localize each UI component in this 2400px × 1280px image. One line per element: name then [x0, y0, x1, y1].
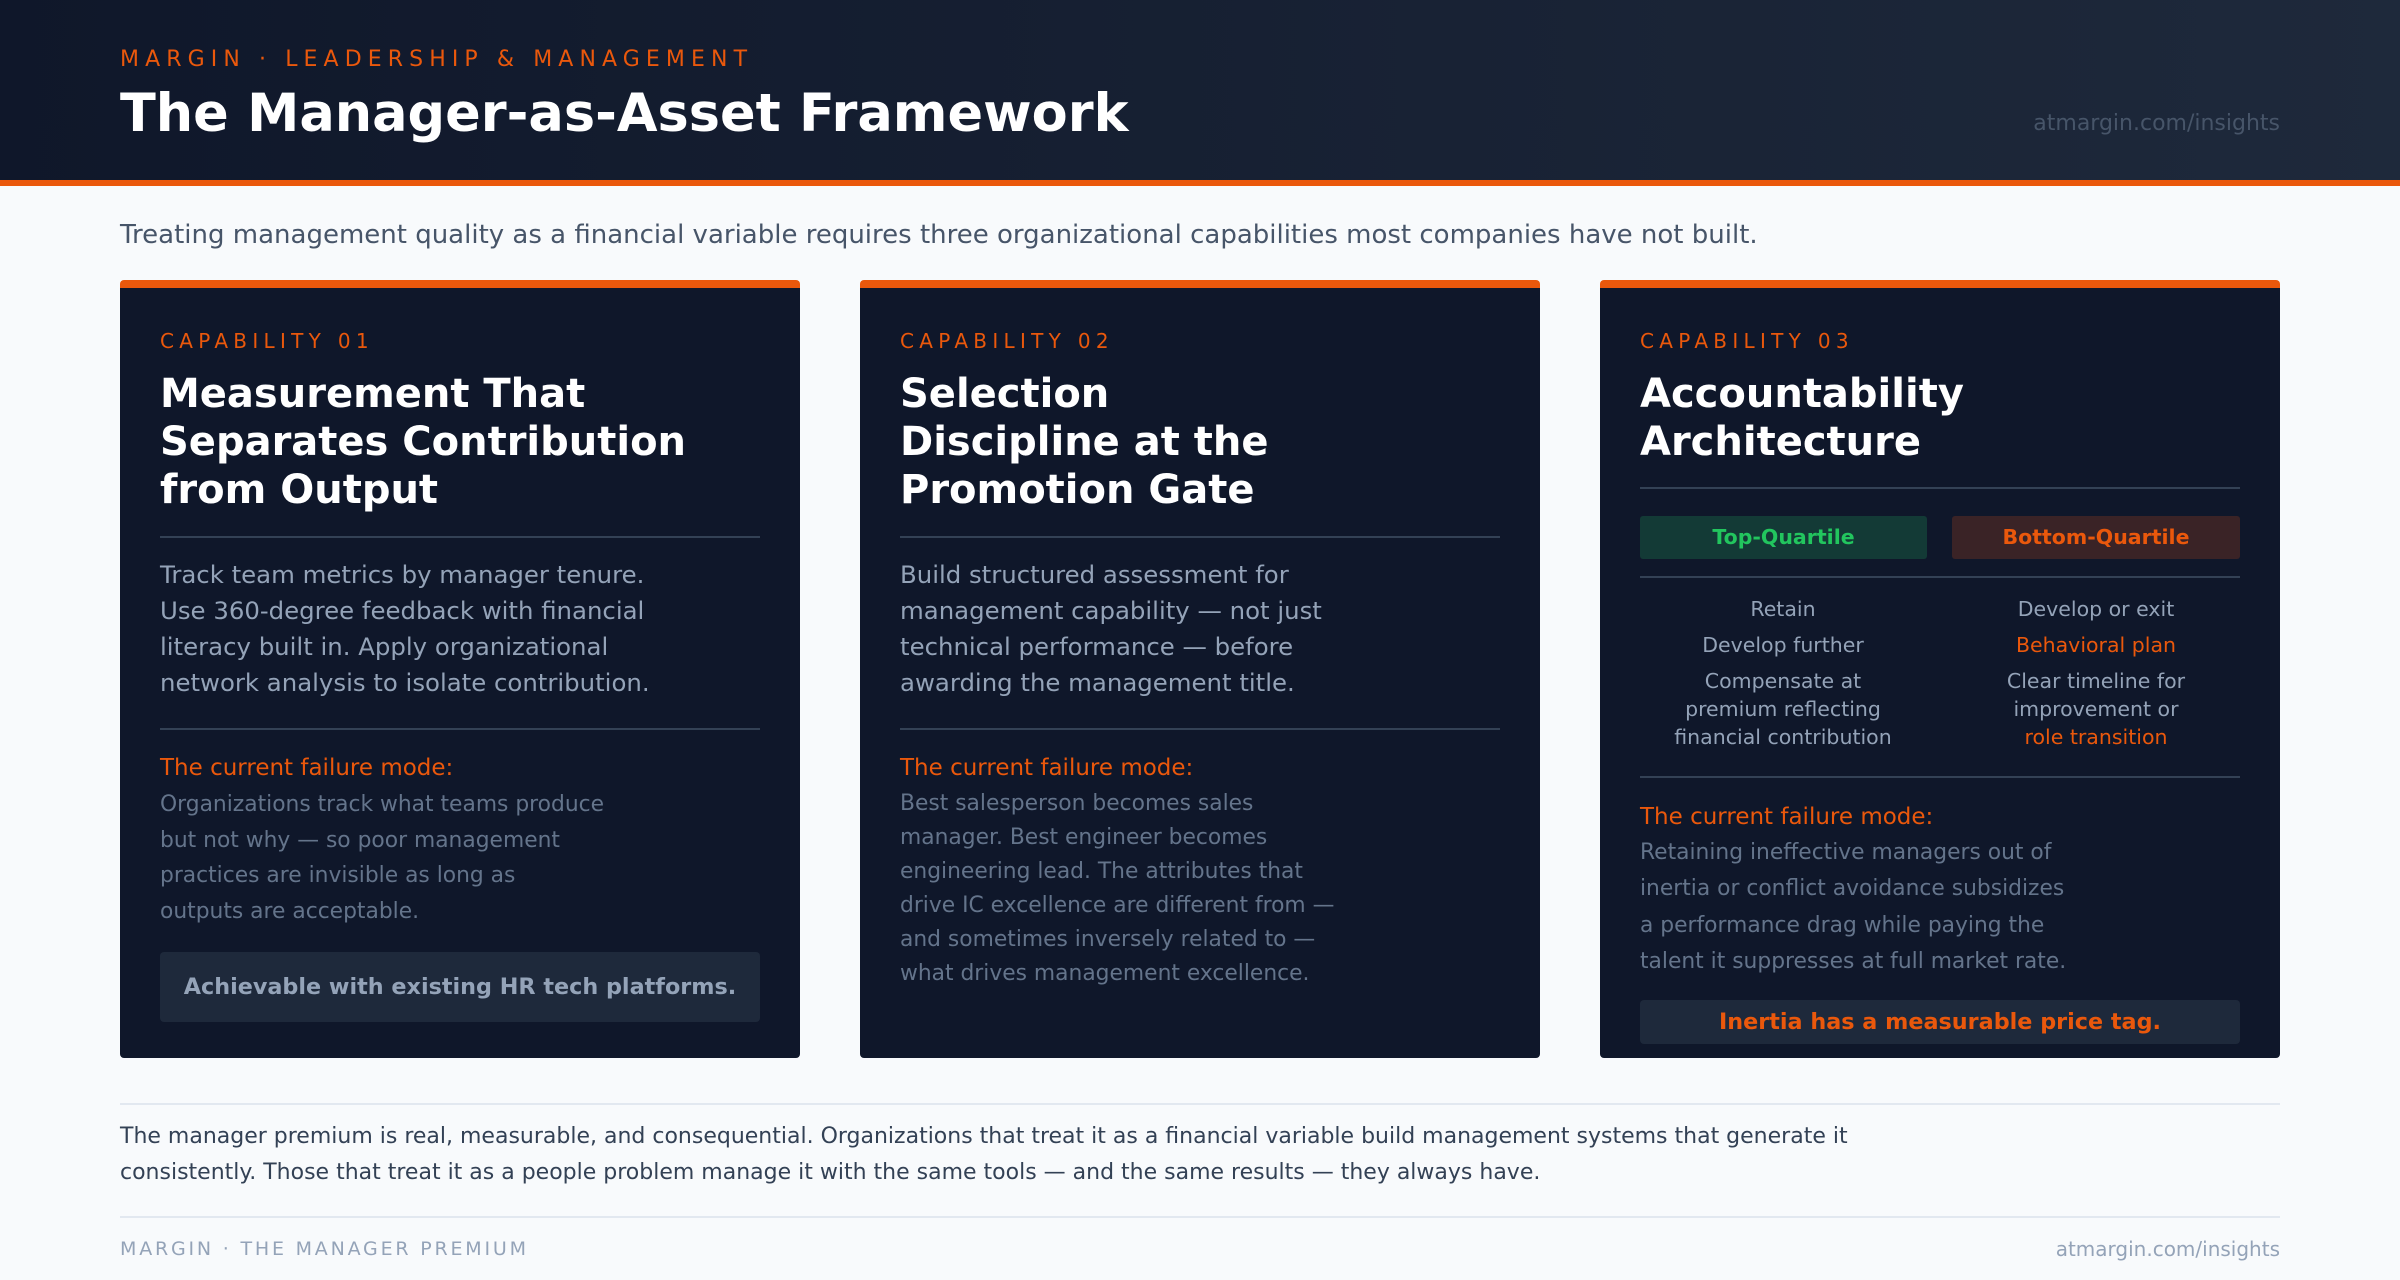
column: bottom quartile actions: role transition: [2024, 725, 2168, 749]
card title 01: Separates Contribution: [160, 419, 686, 465]
failure text 02: manager. Best engineer becomes: [900, 825, 1267, 850]
failure text 03: inertia or conflict avoidance subsidizes: [1640, 876, 2064, 901]
panel: capability 01: [120, 280, 800, 1058]
body 02: technical performance — before: [900, 632, 1293, 661]
subtitle: Treating management quality as a financial variable requires three organizational capabilities most companies have not built.: [120, 220, 1758, 250]
failure text 01: but not why — so poor management: [160, 828, 560, 852]
column: top quartile actions: [1674, 597, 1892, 749]
card title 02: Discipline at the: [900, 419, 1268, 465]
body 01: network analysis to isolate contribution.: [160, 668, 650, 697]
conclusion text: [120, 1124, 1848, 1185]
failure text 01: Organizations track what teams produce: [160, 792, 604, 817]
eyebrow 03: CAPABILITY 03: [1640, 329, 1854, 353]
failure text 01: practices are invisible as long as: [160, 863, 515, 888]
failure text 01: [160, 792, 604, 924]
card title 01: Measurement That: [160, 371, 585, 417]
eyebrow: MARGIN · LEADERSHIP & MANAGEMENT: [120, 47, 753, 72]
column: bottom quartile actions: Develop or exit Behavioral plan Clear timeline for: [2007, 597, 2185, 693]
conclusion text: The manager premium is real, measurable, and consequential. Organizations that treat it as a financial variable build management systems that generate it: [120, 1124, 1848, 1149]
header url: atmargin.com/insights: [2033, 111, 2280, 136]
card title 01: from Output: [160, 467, 438, 513]
column: top quartile actions: financial contribution: [1674, 725, 1892, 749]
card title 02: [900, 371, 1268, 513]
body 02: Build structured assessment for: [900, 560, 1289, 589]
column: bottom quartile actions: [2007, 597, 2186, 749]
failure text 03: Retaining ineffective managers out of: [1640, 840, 2051, 865]
card title 03: Accountability: [1640, 371, 1964, 417]
column: bottom quartile actions: improvement or: [2013, 697, 2179, 721]
failure text 02: what drives management excellence.: [900, 961, 1309, 986]
failure text 03: a performance drag while paying the: [1640, 913, 2044, 938]
failure text 03: talent it suppresses at full market rate.: [1640, 949, 2066, 974]
failure text 02: Best salesperson becomes sales: [900, 791, 1253, 816]
body 02: awarding the management title.: [900, 668, 1295, 697]
eyebrow 01: CAPABILITY 01: [160, 329, 374, 353]
pill: top quartile: [1640, 516, 1927, 559]
card title 03: Architecture: [1640, 419, 1921, 465]
panel: capability 03: [1600, 280, 2280, 1058]
conclusion text: consistently. Those that treat it as a people problem manage it with the same tools — and the same results — they always have.: [120, 1160, 1540, 1185]
callout 03: [1640, 1000, 2240, 1044]
failure text 02: and sometimes inversely related to —: [900, 927, 1315, 952]
footer left: MARGIN · THE MANAGER PREMIUM: [120, 1238, 529, 1260]
body 01: literacy built in. Apply organizational: [160, 632, 608, 661]
card title 01: [160, 371, 686, 513]
pill: top quartile: Top-Quartile: [1712, 525, 1855, 549]
pill: bottom quartile: Bottom-Quartile: [2002, 525, 2189, 549]
pill: bottom quartile: [1952, 516, 2240, 559]
card title 03: [1640, 371, 1964, 465]
failure text 01: outputs are acceptable.: [160, 898, 419, 924]
card title 02: Promotion Gate: [900, 467, 1254, 513]
body 02: management capability — not just: [900, 596, 1322, 625]
failure text 03: [1640, 840, 2066, 974]
failure text 02: [900, 791, 1334, 986]
callout 03: Inertia has a measurable price tag.: [1719, 1009, 2161, 1035]
callout 01: Achievable with existing HR tech platforms.: [184, 974, 736, 1000]
eyebrow 02: CAPABILITY 02: [900, 329, 1114, 353]
column: top quartile actions: Retain Develop further Compensate at: [1702, 597, 1864, 693]
title: The Manager-as-Asset Framework: [120, 83, 1128, 144]
body 02: [900, 560, 1322, 697]
failure text 02: drive IC excellence are different from —: [900, 893, 1334, 918]
orange rule: [0, 180, 2400, 186]
header: [0, 0, 2400, 180]
card title 02: Selection: [900, 371, 1109, 417]
failure label 02: The current failure mode:: [900, 755, 1193, 781]
failure text 02: engineering lead. The attributes that: [900, 859, 1303, 884]
body 01: [160, 560, 650, 697]
body 01: Track team metrics by manager tenure.: [160, 560, 644, 589]
failure label 01: The current failure mode:: [160, 755, 453, 781]
footer right: atmargin.com/insights: [2056, 1237, 2280, 1261]
failure label 03: The current failure mode:: [1640, 804, 1933, 830]
column: top quartile actions: premium reflecting: [1685, 697, 1881, 721]
panel: capability 02: [860, 280, 1540, 1058]
body 01: Use 360-degree feedback with financial: [160, 596, 644, 625]
callout 01: [160, 952, 760, 1022]
